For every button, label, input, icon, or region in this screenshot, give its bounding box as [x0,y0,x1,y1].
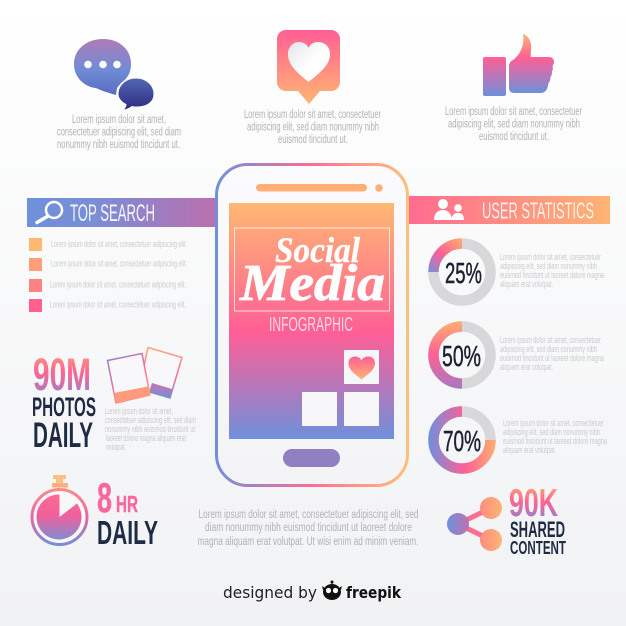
donut 70% [433,412,490,468]
stat: 90K shared content: SHARED [510,517,565,542]
subtitle: INFOGRAPHIC [269,314,353,336]
text: chat caption: consectetuer adipiscing elit, sed diam [57,126,181,138]
stat: 90M photos daily: 90M [33,349,91,400]
text: central description: diam nonummy nibh euismod tincidunt ut laoreet dolore [205,522,412,534]
icon: heart notification [277,30,340,104]
search list: Lorem ipsum dolor sit amet, consectetuer adipiscing elit. [51,239,187,249]
speaker [256,184,367,192]
icon: stopwatch [32,475,87,544]
search list: Lorem ipsum dolor sit amet, consectetuer adipiscing elit. [50,300,186,310]
panel: top search [27,198,215,312]
title: Media: Media [239,255,385,312]
icon: users [434,199,464,220]
text: central description: Lorem ipsum dolor sit amet, consectetuer adipiscing elit, sed [198,509,418,521]
stat: 8 hr daily: 8 [97,474,112,521]
text: 50% description: aliquam erat volutpat. [500,362,553,372]
title: Social: Social [275,230,360,270]
text: central description [198,509,418,548]
phone [216,164,408,486]
search list: Lorem ipsum dolor sit amet, consectetuer adipiscing elit. [51,258,187,268]
icon: share [447,497,502,551]
text: chat caption [57,114,181,151]
credit: designed by freepik: freepik [346,583,401,602]
text: photos description: consectetuer adipiscing elit, sed diam [105,415,196,425]
icon: freepik mascot [322,580,342,600]
text: photos description: Lorem ipsum dolor sit amet, [105,406,173,416]
icon: magnifier [37,202,62,222]
credit: designed by freepik [223,580,401,602]
stat: 8 hr daily [97,474,158,551]
text: photos description: laoreet dolore magna aliquam erat [106,433,186,443]
phone body [216,164,408,486]
icon: thumbs up [483,34,554,96]
text: chat caption: nonummy nibh euismod tincidunt ut. [57,139,180,151]
text: central description: magna aliquam erat volutpat. Ut wisi enim ad minim veniam. [198,536,418,548]
text: 70% description: aliquam erat volutpat. [503,445,556,455]
donut 25%: 25% [445,258,482,290]
stat: 90M photos daily: DAILY [33,416,93,455]
text: 50% description [500,335,604,372]
text: thumbs caption: euismod tincidunt ut. [479,131,549,143]
donut 50% [433,326,490,384]
text: 25% description: aliquam erat volutpat. [500,279,553,289]
text: photos description: volutpat. [106,442,126,452]
top search banner [27,198,215,227]
top search heading: TOP SEARCH [70,200,155,227]
screen [229,203,394,439]
stat: 90K shared content [509,482,566,558]
text: heart caption: adipiscing elit, sed diam nonummy nibh [247,122,379,134]
credit: designed by freepik: designed by [223,583,317,602]
panel: user statistics banner [409,196,610,224]
photo tile with heart [344,350,379,384]
text: 70% description [503,418,607,455]
photo tile [302,392,337,426]
title frame [234,228,390,311]
text: 25% description [500,252,604,289]
stat: 90M photos daily [32,349,96,455]
stat: 90K shared content: 90K [509,482,558,525]
stat: 8 hr daily: DAILY [97,514,158,551]
search list [29,238,187,312]
icon: photo prints [108,348,182,403]
stat: 90K shared content: CONTENT [510,538,566,558]
camera [375,184,383,192]
stat: 8 hr daily: HR [116,491,138,517]
stat: 90M photos daily: PHOTOS [32,392,96,422]
text: heart caption: euismod tincidunt ut. [278,134,348,146]
home button [283,449,340,467]
search list: Lorem ipsum dolor sit amet, consectetuer adipiscing elit. [50,280,186,290]
photo tile [344,392,379,426]
donut 25% [434,244,490,300]
text: thumbs caption [445,106,582,143]
text: heart caption [244,109,381,146]
donut 70%: 70% [443,426,481,458]
donut 50%: 50% [442,341,481,373]
text: heart caption: Lorem ipsum dolor sit amet, consectetuer [244,109,381,121]
text: photos description [105,406,196,452]
text: chat caption: Lorem ipsum dolor sit amet, [72,114,166,126]
icon: chat bubbles [74,39,154,110]
text: photos description: nonummy nibh euismod tincidunt ut [105,424,195,434]
